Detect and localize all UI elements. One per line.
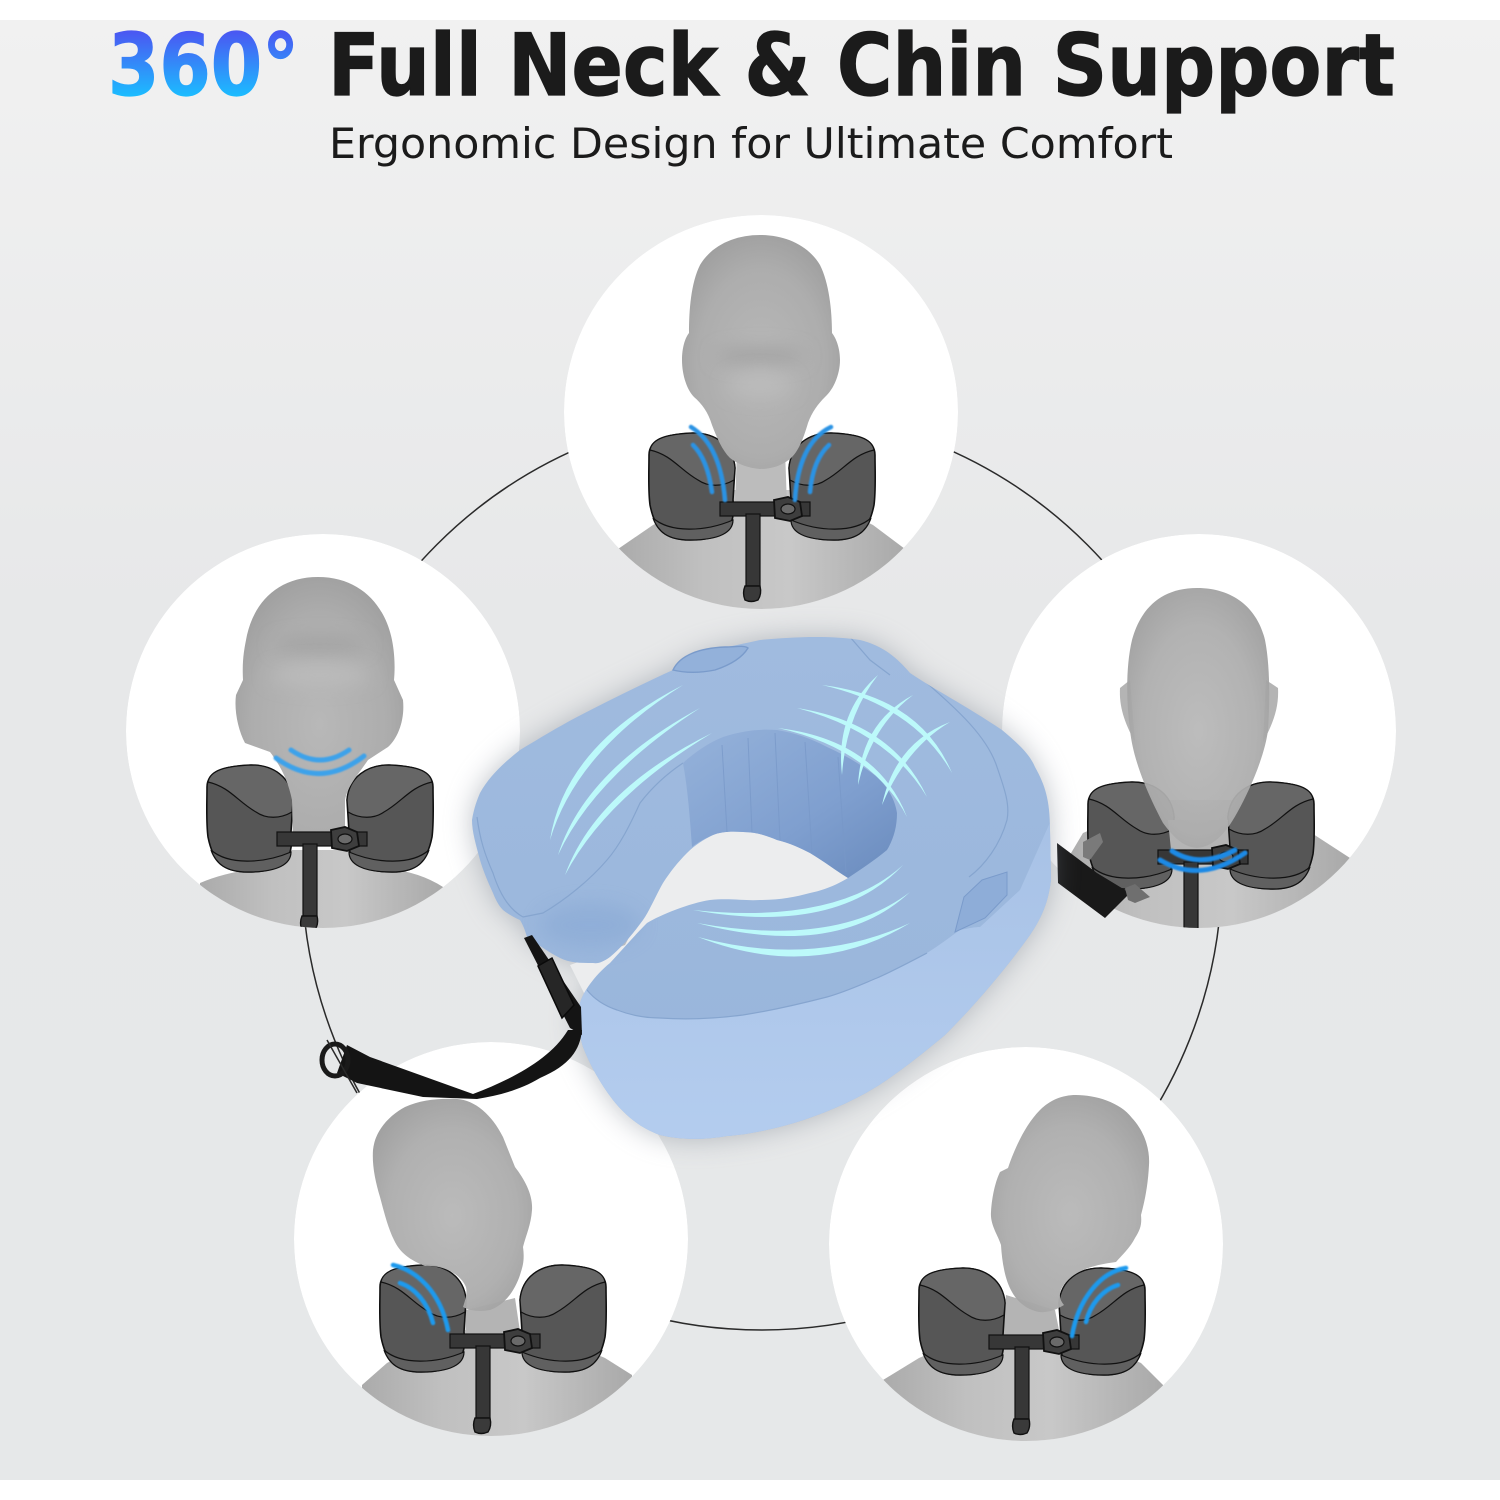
- shoulders: [1070, 831, 1350, 928]
- strap and buckle: [277, 827, 367, 932]
- lower section: [580, 824, 1051, 1139]
- stitching: [477, 637, 1008, 1019]
- strap: [1157, 844, 1249, 928]
- body: [472, 637, 1051, 1139]
- strap and buckle: [450, 1329, 540, 1434]
- head: [991, 1095, 1149, 1312]
- neck pillow: [919, 1268, 1145, 1375]
- shoulders: [362, 1330, 632, 1436]
- subtitle: Ergonomic Design for Ultimate Comfort: [329, 119, 1173, 168]
- body panels: [477, 637, 1060, 1150]
- panel: lower-right view, right side support: [829, 1047, 1223, 1460]
- pillow shadow: [472, 637, 1051, 1139]
- panel: left view, chin support: [126, 534, 520, 950]
- shoulders: [200, 850, 443, 928]
- neck: [1004, 1295, 1059, 1334]
- inner wall: [683, 730, 897, 878]
- neck: [736, 462, 786, 502]
- shoulders: [884, 1330, 1163, 1441]
- neck: [1169, 820, 1228, 850]
- blue chin strap: [1160, 850, 1245, 870]
- arm tip shading: [550, 908, 633, 942]
- top loop: [673, 646, 748, 672]
- support arcs: [691, 427, 831, 500]
- inner wall pleats: [722, 733, 846, 872]
- cyan motion arcs: [550, 675, 952, 956]
- shoulders: [618, 490, 905, 620]
- connecting ring: [302, 410, 1222, 1330]
- head: [373, 1099, 532, 1311]
- neck pillow: [649, 433, 875, 540]
- black strap with buckle and D-ring: [322, 935, 582, 1099]
- support arcs: [393, 1265, 448, 1330]
- strap and buckle: [989, 1330, 1079, 1434]
- panel: right view, front strap: [1002, 534, 1396, 950]
- side clasp: [955, 872, 1007, 932]
- title: 360°: [108, 16, 299, 116]
- support arcs: [276, 750, 364, 774]
- head and neck: [235, 577, 403, 845]
- panel: lower-left view, left side support: [294, 1042, 688, 1460]
- support arcs: [1072, 1268, 1126, 1336]
- neck pillow: [1088, 782, 1314, 889]
- panel: top view, back of neck support: [564, 215, 958, 620]
- neck: [465, 1298, 520, 1334]
- hole and gap background: [570, 820, 860, 1005]
- head: [682, 235, 840, 469]
- product: blue neck pillow: [322, 637, 1060, 1150]
- head: [1120, 588, 1278, 848]
- strap and buckle: [720, 497, 810, 602]
- loose strap behind right panel: [1057, 833, 1150, 918]
- neck pillow: [207, 765, 433, 872]
- neck pillow: [380, 1265, 606, 1372]
